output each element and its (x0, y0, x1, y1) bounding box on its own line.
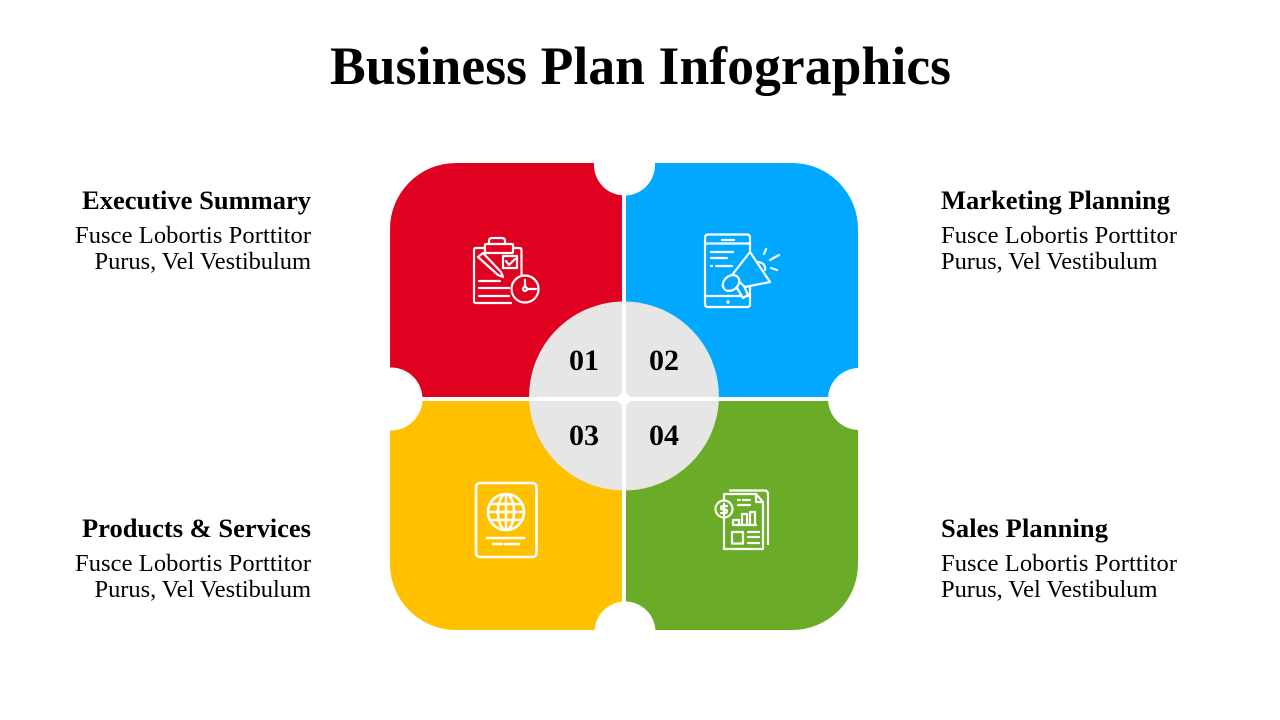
number 02: 02 (649, 344, 679, 377)
description: Fusce Lobortis Porttitor (941, 550, 1177, 577)
icon: financial report (716, 490, 768, 549)
description: Purus, Vel Vestibulum (94, 248, 311, 275)
icon: passport with globe (476, 483, 536, 557)
description: Fusce Lobortis Porttitor (75, 222, 311, 249)
megaphone body (732, 252, 770, 287)
panel: green quadrant (626, 401, 858, 630)
description: Fusce Lobortis Porttitor (75, 550, 311, 577)
center circle segment 02 (626, 302, 719, 397)
description: Fusce Lobortis Porttitor (941, 222, 1177, 249)
heading: Sales Planning (941, 513, 1108, 543)
number 04: 04 (649, 419, 679, 452)
notch: left (360, 368, 422, 430)
heading: Marketing Planning (941, 185, 1170, 215)
center circle segment 01 (529, 302, 622, 397)
text block: Sales Planning (941, 513, 1177, 603)
number 01: 01 (569, 344, 599, 377)
description: Purus, Vel Vestibulum (94, 576, 311, 603)
notch: right (828, 368, 890, 430)
center gap (612, 387, 636, 411)
description: Purus, Vel Vestibulum (941, 248, 1158, 275)
panel: red quadrant (390, 163, 622, 397)
notch: top (594, 134, 655, 196)
title: Business Plan Infographics (330, 36, 951, 96)
panel: yellow quadrant (390, 401, 622, 630)
panel: blue quadrant (626, 163, 858, 397)
icon: phone with megaphone (705, 234, 779, 307)
number 03: 03 (569, 419, 599, 452)
megaphone handle (737, 286, 748, 298)
icon: clipboard with clock (474, 238, 538, 303)
notch: bottom (594, 602, 656, 662)
description: Purus, Vel Vestibulum (941, 576, 1158, 603)
megaphone mouth (720, 272, 742, 294)
center circle segment 03 (529, 401, 622, 490)
center circle segment 04 (626, 401, 719, 490)
heading: Products & Services (82, 513, 311, 543)
text block: Products & Services (75, 513, 311, 603)
text block: Marketing Planning (941, 185, 1177, 275)
text block: Executive Summary (75, 185, 311, 275)
heading: Executive Summary (82, 185, 311, 215)
puzzle diagram (360, 134, 890, 662)
